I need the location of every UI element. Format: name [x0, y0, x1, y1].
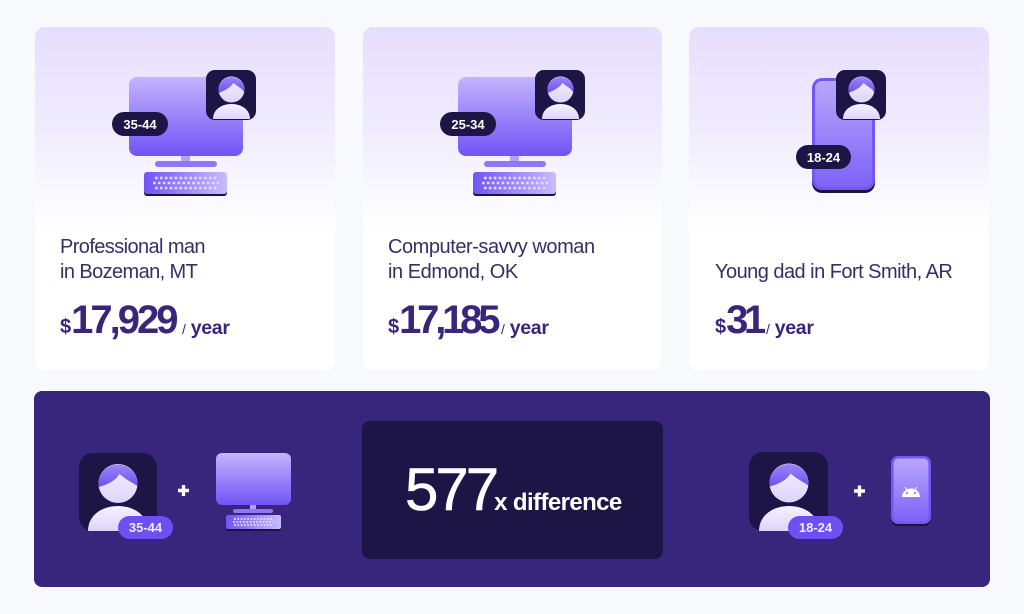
description: Computer-savvy woman	[388, 236, 595, 258]
panel: professional man card	[35, 27, 335, 370]
description: in Edmond, OK	[388, 261, 518, 283]
description: Young dad in Fort Smith, AR	[715, 261, 952, 283]
panel: comparison banner	[34, 391, 990, 587]
icon: desktop with avatar, age 25-34	[440, 70, 585, 196]
icon: avatar and desktop, age 35-44: 35-44	[129, 520, 163, 535]
price: $31	[715, 298, 762, 342]
icon: phone with avatar, age 18-24: 18-24	[807, 150, 841, 165]
price: / year	[501, 317, 549, 339]
description: in Bozeman, MT	[60, 261, 197, 283]
price	[388, 298, 549, 342]
icon: avatar and phone, age 18-24: 18-24	[799, 520, 833, 535]
price: $17,929	[60, 298, 175, 342]
price: / year	[182, 317, 230, 339]
icon: avatar and phone, age 18-24	[749, 452, 931, 539]
price: / year	[766, 317, 814, 339]
icon: phone with avatar, age 18-24	[796, 70, 886, 193]
icon: desktop with avatar, age 35-44: 35-44	[123, 117, 157, 132]
description	[388, 236, 595, 283]
price	[715, 298, 814, 342]
icon: desktop with avatar, age 35-44	[112, 70, 256, 196]
icon: avatar and desktop, age 35-44	[79, 453, 291, 539]
panel: young dad card	[689, 27, 989, 370]
price	[60, 298, 230, 342]
price: $17,185	[388, 298, 496, 342]
panel: 577x difference callout	[362, 421, 663, 559]
description	[60, 236, 205, 283]
panel: computer-savvy woman card	[363, 27, 662, 370]
icon: desktop with avatar, age 25-34: 25-34	[451, 117, 485, 132]
big number: 577x difference	[405, 456, 622, 523]
description: Professional man	[60, 236, 205, 258]
